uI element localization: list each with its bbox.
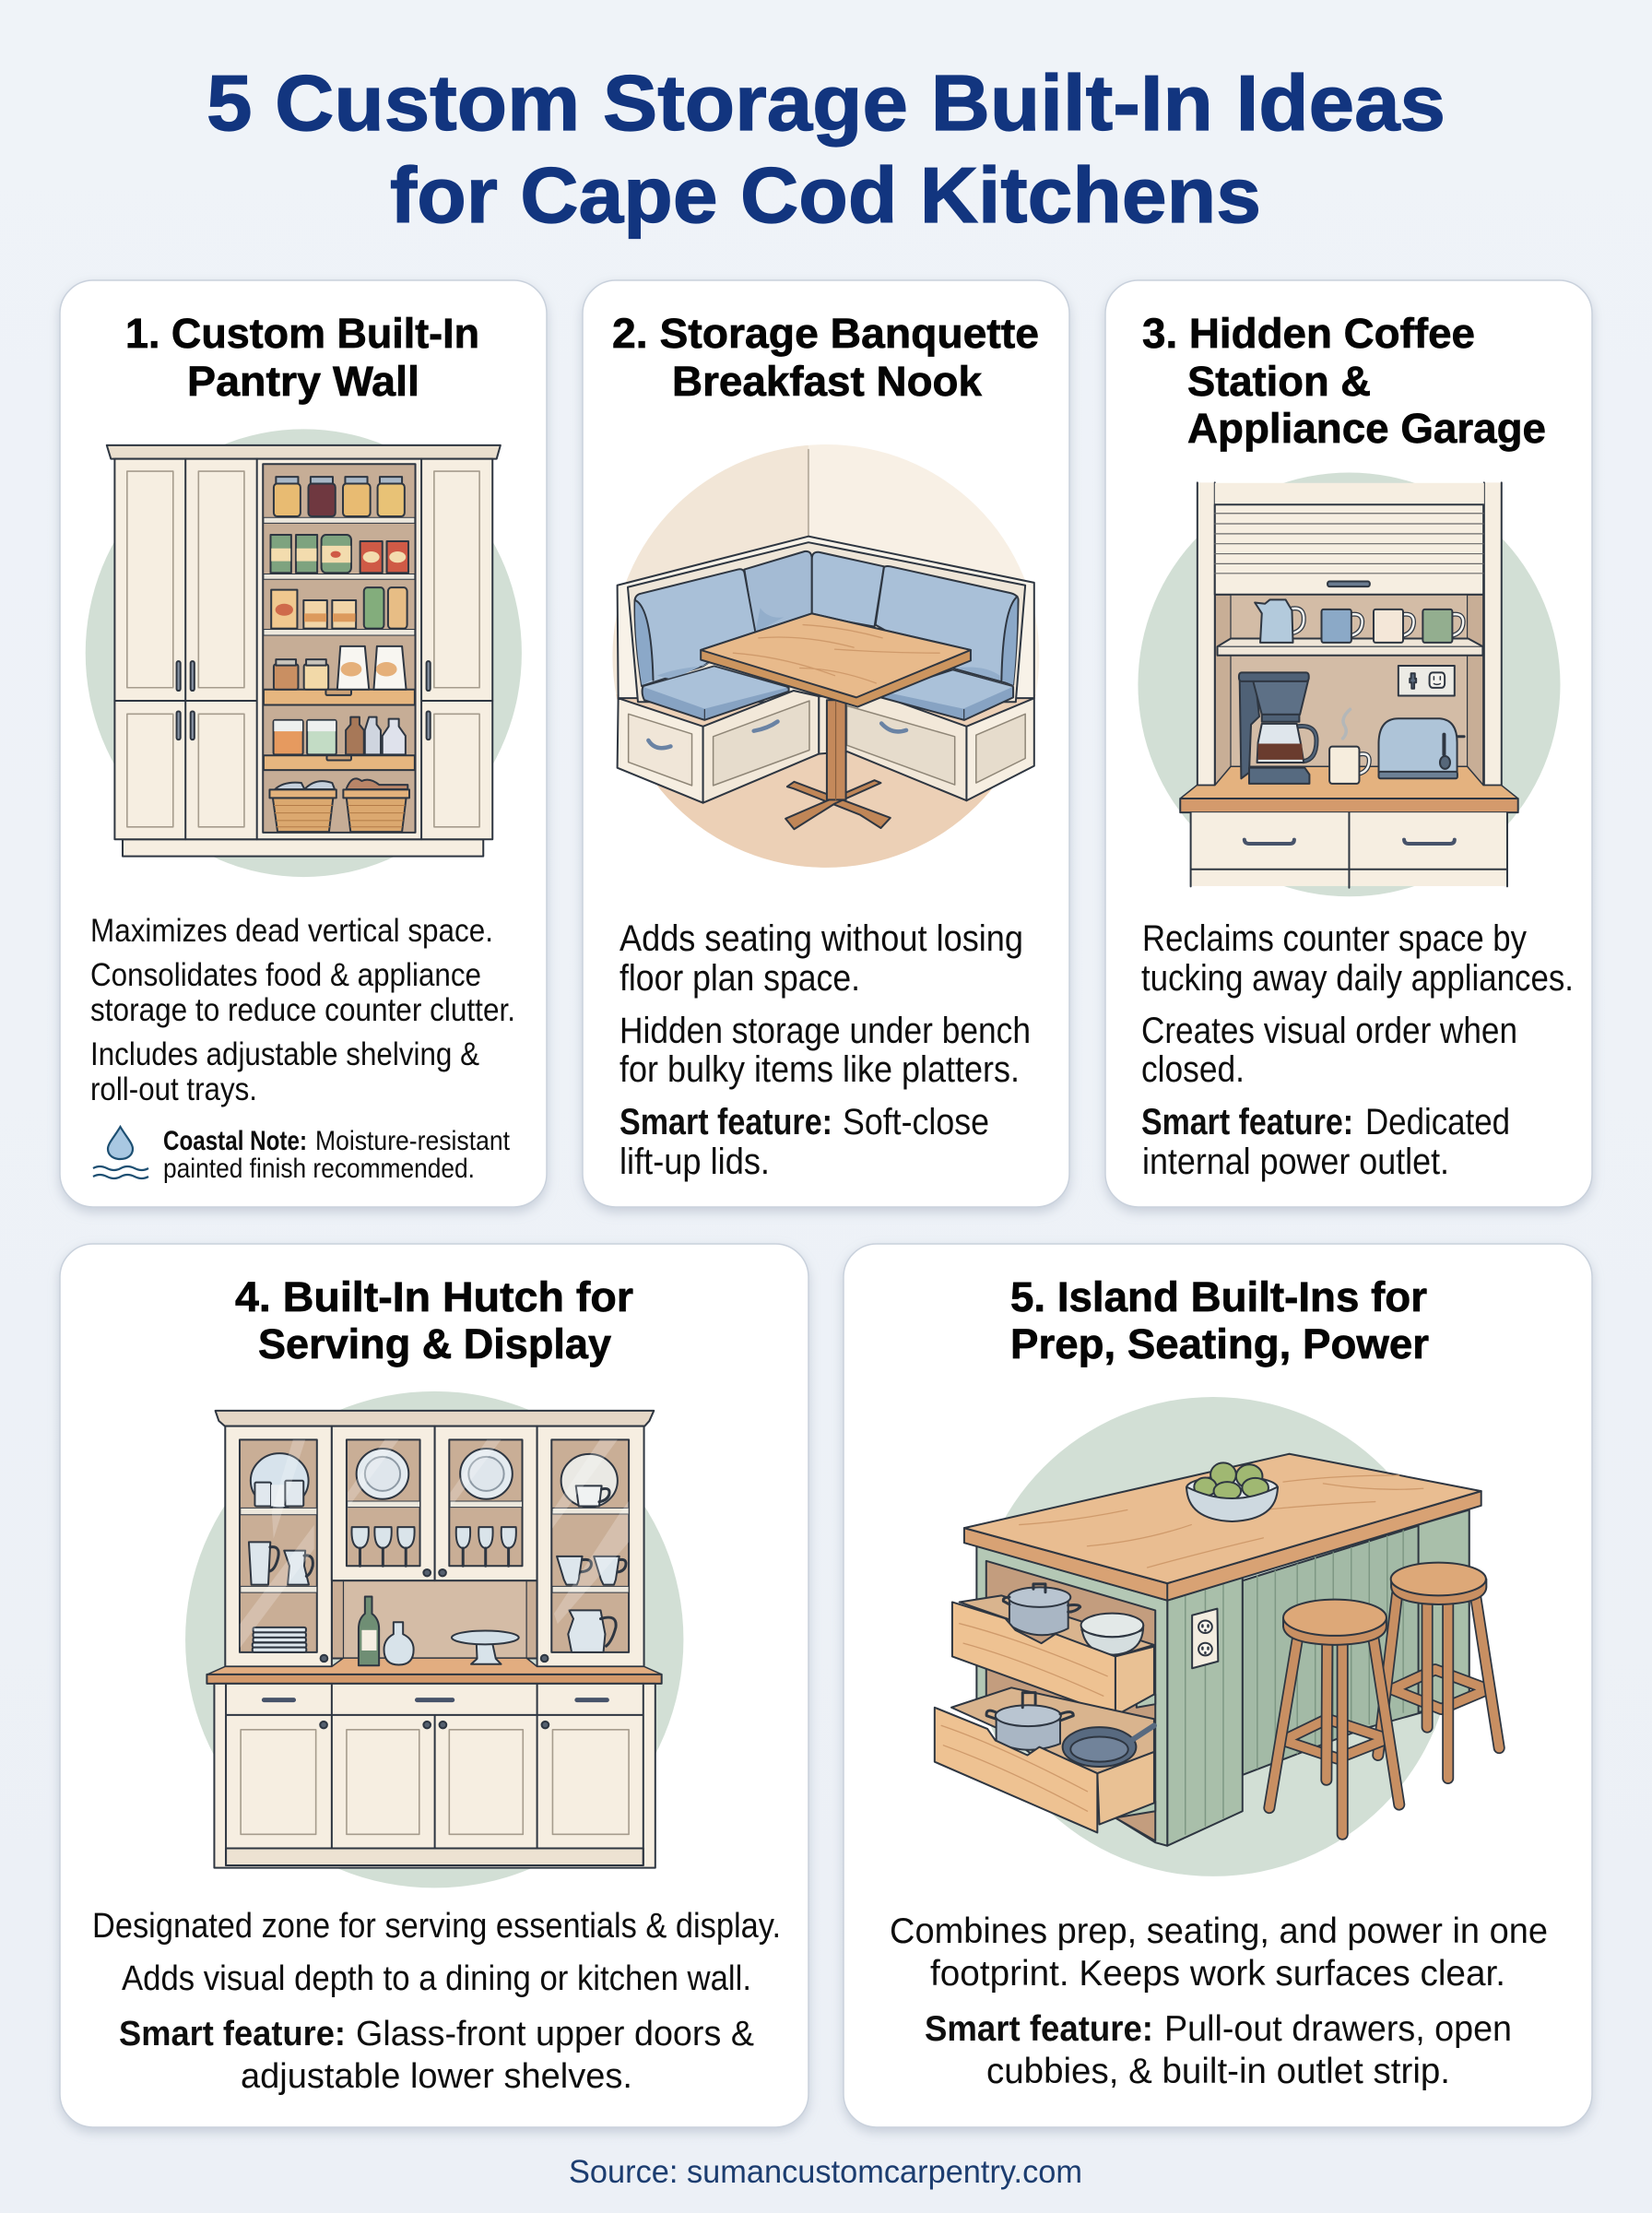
heading: Breakfast Nook — [672, 358, 983, 405]
text block: Creates visual order when — [1141, 1011, 1517, 1051]
heading: 4. Built-In Hutch for — [235, 1273, 633, 1320]
text block: floor plan space. — [620, 958, 860, 999]
frame — [618, 537, 1034, 698]
text block: roll-out trays. — [90, 1071, 257, 1107]
heading: Pantry Wall — [187, 358, 419, 405]
steaming cup — [1329, 709, 1369, 784]
heading: Prep, Seating, Power — [1010, 1320, 1429, 1367]
kettle and mugs — [1255, 599, 1463, 643]
cans row 2 — [271, 535, 408, 573]
heading: 2. Storage Banquette — [612, 310, 1039, 357]
text block: footprint. Keeps work surfaces clear. — [930, 1954, 1505, 1994]
text block: Designated zone for serving essentials & display. — [92, 1907, 781, 1946]
fruit bowl — [1186, 1462, 1278, 1521]
seats — [643, 666, 789, 720]
heading: 1. Custom Built-In — [125, 310, 479, 357]
title: for Cape Cod Kitchens — [390, 152, 1261, 240]
icon: water drop and waves — [93, 1127, 148, 1178]
text block: Includes adjustable shelving & — [90, 1036, 479, 1072]
pitchers and mugs — [249, 1542, 626, 1652]
panel: 2. storage banquette breakfast nook — [583, 280, 1069, 1207]
jars and bags row 4 — [274, 646, 407, 690]
heading: 3. Hidden Coffee — [1142, 310, 1475, 357]
heading — [1142, 310, 1546, 452]
card background — [60, 280, 547, 1207]
heading: Station & — [1187, 358, 1371, 405]
text block: tucking away daily appliances. — [1141, 958, 1574, 999]
text block: storage to reduce counter clutter. — [90, 992, 515, 1028]
outlet — [1398, 666, 1455, 696]
text block: Smart feature: — [1141, 1102, 1353, 1142]
text block: Combines prep, seating, and power in one — [890, 1911, 1548, 1951]
text block: Soft-close — [843, 1102, 989, 1142]
card background — [583, 280, 1069, 1207]
text block: Adds visual depth to a dining or kitchen wall. — [122, 1959, 751, 1998]
illustration: kitchen island and stools — [935, 1397, 1499, 1876]
glass reflections — [240, 1439, 629, 1648]
text block: Smart feature: — [119, 2015, 346, 2053]
panel: 4. built-in hutch — [60, 1244, 808, 2127]
shelf — [1218, 638, 1482, 656]
text block: Smart feature: — [925, 2009, 1153, 2049]
wine glasses — [351, 1527, 516, 1566]
island body — [1243, 1509, 1469, 1775]
text block: Dedicated — [1365, 1102, 1510, 1142]
front stool — [1269, 1600, 1399, 1834]
text block: Adds seating without losing — [620, 918, 1023, 959]
coastal note: painted finish recommended. — [163, 1154, 475, 1184]
text block: lift-up lids. — [620, 1142, 770, 1182]
coffee maker — [1239, 672, 1316, 784]
card background — [844, 1244, 1592, 2127]
heading — [125, 310, 479, 405]
card background — [1105, 280, 1592, 1207]
base cabinet — [214, 1684, 655, 1868]
text block — [90, 913, 515, 1107]
packages row 3 — [271, 587, 407, 629]
upper drawer — [952, 1584, 1154, 1716]
counter — [1180, 766, 1518, 799]
text block — [890, 1911, 1548, 2091]
coastal note — [163, 1126, 511, 1184]
lower drawer — [935, 1687, 1154, 1832]
text block: Pull-out drawers, open — [1164, 2009, 1512, 2049]
card background — [60, 1244, 808, 2127]
plates and cups — [251, 1449, 618, 1508]
title: 5 Custom Storage Built-In Ideas — [206, 60, 1446, 148]
text block — [620, 918, 1031, 1182]
source line: Source: sumancustomcarpentry.com — [569, 2154, 1082, 2190]
heading — [612, 310, 1039, 405]
lower drawers — [1191, 812, 1507, 886]
back stool — [1378, 1563, 1499, 1779]
panel: 3. hidden coffee station — [1105, 280, 1592, 1207]
heading: 5. Island Built-Ins for — [1010, 1273, 1427, 1320]
jars row 1 — [274, 477, 405, 516]
heading: Serving & Display — [258, 1320, 611, 1367]
text block: Smart feature: — [620, 1102, 832, 1142]
text block: Glass-front upper doors & — [356, 2015, 754, 2053]
text block: Consolidates food & appliance — [90, 957, 481, 993]
coastal note: Moisture-resistant — [315, 1126, 511, 1156]
countertop — [964, 1491, 1481, 1601]
text block: adjustable lower shelves. — [241, 2057, 632, 2096]
text block: internal power outlet. — [1142, 1142, 1449, 1182]
containers row 5 — [274, 717, 406, 754]
text block: for bulky items like platters. — [620, 1049, 1020, 1090]
text block: cubbies, & built-in outlet strip. — [986, 2052, 1450, 2091]
panel: 1. custom built-in pantry wall — [60, 280, 547, 1207]
text block — [92, 1907, 781, 2096]
toaster — [1378, 718, 1464, 778]
bottle, flask, cake stand — [359, 1597, 519, 1665]
text block: closed. — [1141, 1049, 1245, 1090]
text block: Maximizes dead vertical space. — [90, 913, 493, 949]
illustration: hutch cabinet — [185, 1391, 683, 1888]
power outlet — [1192, 1609, 1218, 1668]
heading — [235, 1273, 633, 1367]
text block: Hidden storage under bench — [620, 1011, 1031, 1051]
base panels — [618, 698, 703, 803]
baskets — [269, 778, 409, 832]
table top — [701, 613, 971, 707]
back cushions — [744, 551, 812, 638]
coastal note: Coastal Note: — [163, 1126, 307, 1156]
illustration: corner banquette and table — [609, 443, 1044, 871]
panel: 5. island built-ins — [844, 1244, 1592, 2127]
text block — [1141, 918, 1574, 1182]
illustration: coffee station appliance garage — [1138, 473, 1560, 896]
heading — [1010, 1273, 1429, 1367]
heading: Appliance Garage — [1187, 405, 1546, 452]
table leg and base — [787, 782, 891, 828]
title — [206, 60, 1446, 240]
illustration: pantry wall cabinet — [86, 429, 522, 877]
text block: Reclaims counter space by — [1142, 918, 1527, 959]
counter — [207, 1658, 662, 1675]
